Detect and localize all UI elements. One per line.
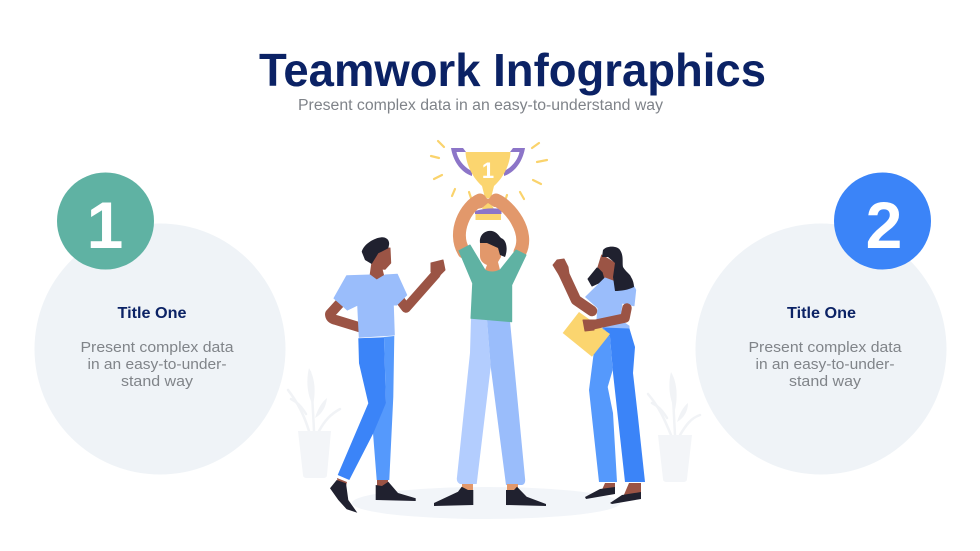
woman trousers — [589, 327, 617, 482]
number badge: 1 — [57, 172, 154, 270]
left man trousers — [373, 336, 394, 480]
text block: step one: in an easy-to-under- — [88, 357, 227, 373]
trophy handles — [451, 148, 525, 176]
centre man arms — [459, 200, 523, 252]
woman hair top — [602, 247, 634, 291]
document — [563, 312, 610, 357]
figure: woman — [553, 247, 645, 504]
left man raised arm — [400, 260, 445, 308]
icon: right plant — [648, 372, 700, 482]
text block: step one — [80, 340, 235, 390]
trophy rays — [431, 141, 547, 199]
heading: step two: Title One — [787, 305, 856, 322]
trophy number: 1 — [482, 158, 494, 183]
centre man hair — [480, 231, 507, 257]
title: Teamwork Infographics — [259, 44, 766, 96]
heading: step one: Title One — [118, 305, 187, 322]
text block: step one: stand way — [121, 374, 194, 390]
centre man shirt — [459, 245, 526, 322]
number badge: 2: 2 — [866, 188, 902, 262]
woman front arm — [583, 308, 627, 331]
subtitle: Present complex data in an easy-to-understand way — [298, 97, 663, 114]
trophy stem and base — [482, 198, 494, 209]
text block: step two: Present complex data — [748, 340, 903, 356]
text block: step two — [748, 340, 903, 390]
text block: step two: in an easy-to-under- — [756, 357, 895, 373]
centre man trousers — [457, 318, 491, 484]
number badge: 1: 1 — [87, 188, 123, 262]
left man hair — [362, 237, 389, 264]
left man shoes — [337, 478, 388, 486]
figure: left man — [330, 237, 445, 513]
number badge: 2 — [834, 172, 931, 270]
panel: step two — [696, 172, 946, 474]
figure: centre man — [434, 194, 546, 506]
centre man shoes — [462, 484, 518, 491]
woman raised arm — [553, 259, 592, 311]
text block: step one: Present complex data — [80, 340, 235, 356]
woman neck and face — [598, 255, 615, 281]
centre man hands — [470, 194, 508, 210]
panel circle: step two — [696, 224, 946, 474]
woman shoes — [601, 483, 641, 497]
trophy cup — [466, 152, 510, 198]
icon: trophy — [431, 141, 547, 220]
text block: step two: stand way — [789, 374, 862, 390]
centre man neck and face — [480, 243, 501, 273]
panel circle: step one — [34, 224, 286, 474]
ground shadow — [352, 487, 620, 519]
icon: left plant — [288, 368, 340, 478]
left man arm on hip — [330, 303, 373, 333]
panel: step one — [34, 172, 286, 474]
left man neck and face — [370, 248, 391, 279]
left man shirt — [334, 274, 407, 337]
woman shirt — [586, 278, 636, 328]
woman hair back — [588, 268, 605, 286]
